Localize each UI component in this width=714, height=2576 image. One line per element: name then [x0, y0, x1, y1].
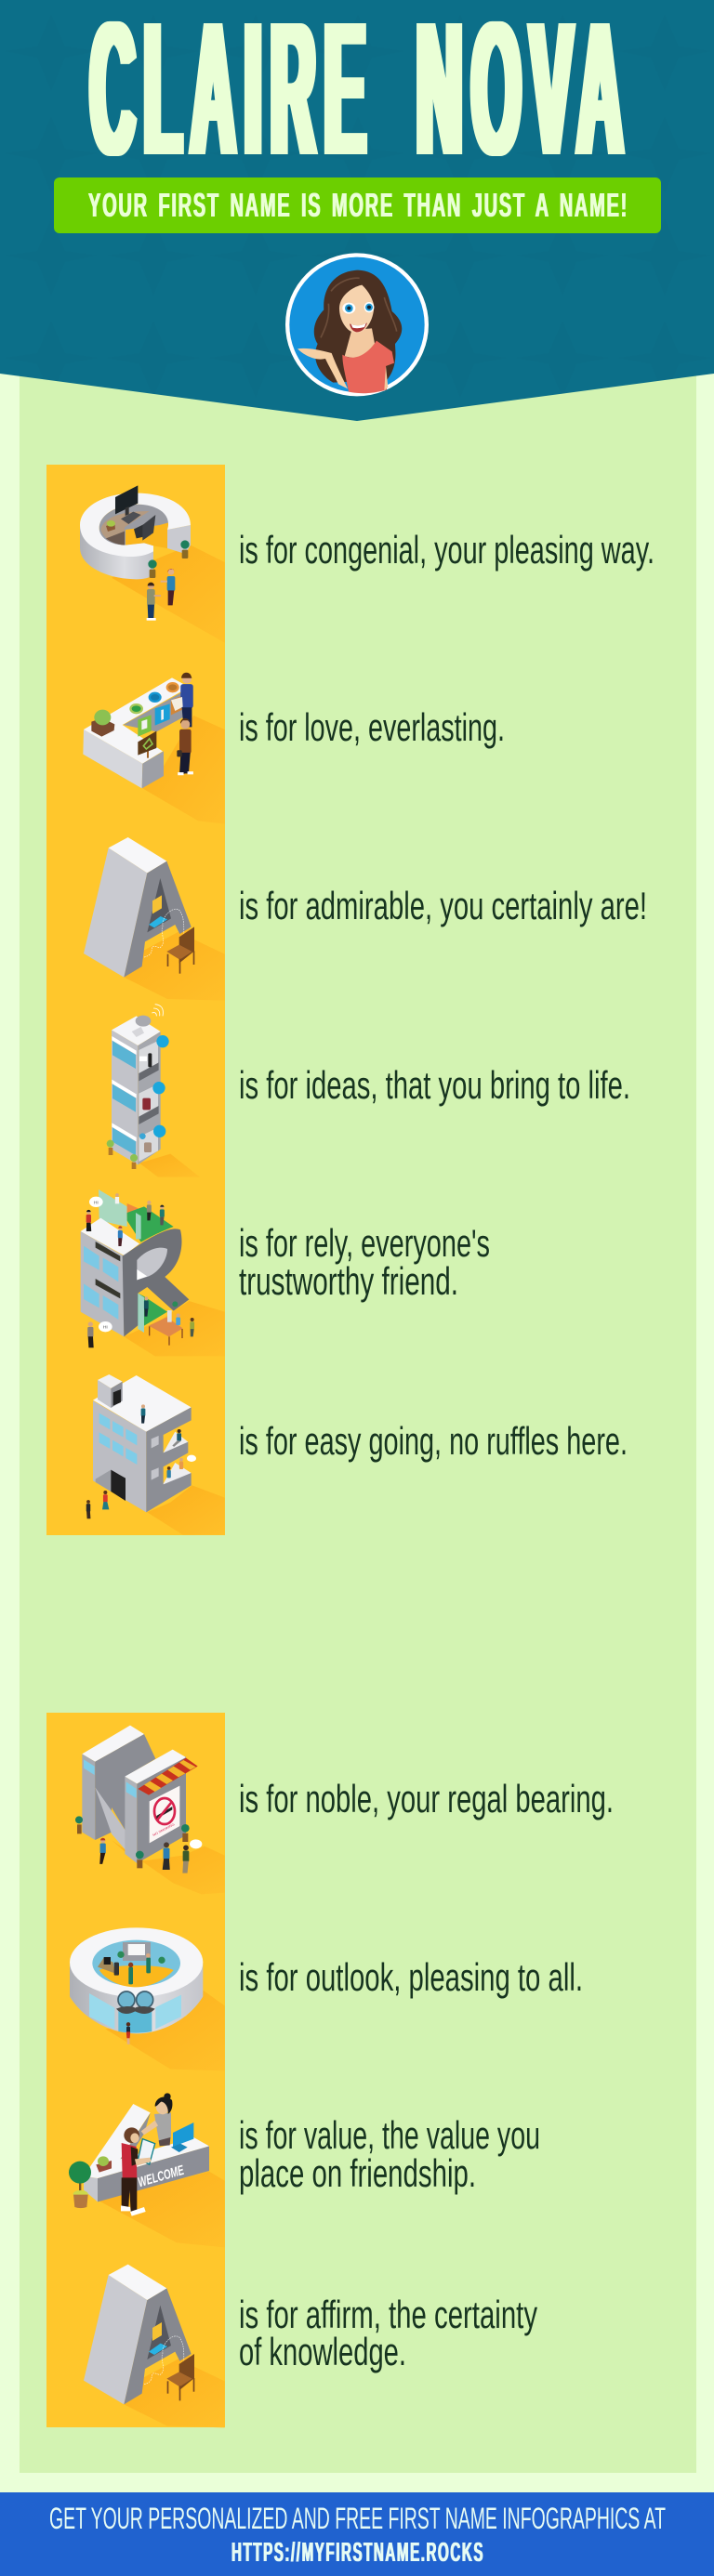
subtitle banner — [54, 177, 661, 233]
text: V lines: is for value, the value you — [239, 2113, 540, 2157]
receptionist — [141, 2093, 172, 2146]
awning — [138, 1758, 198, 1795]
text: R lines — [239, 1221, 490, 1303]
footer — [0, 2492, 714, 2576]
icon: letter A computer building — [84, 837, 225, 1001]
icon: letter N no smoking building — [75, 1726, 225, 1894]
speech bubble: Hi top: HI — [94, 1200, 99, 1205]
icon: letter V welcome desk — [69, 2093, 225, 2247]
header banner — [0, 0, 714, 421]
people on building — [86, 1193, 194, 1347]
no smoking sign: NO SMOKING — [152, 1822, 176, 1837]
speech bubble: Hi top — [89, 1197, 103, 1207]
welcome sign text: WELCOME — [137, 2163, 187, 2190]
no smoking sign — [150, 1786, 179, 1843]
icon: letter C reception desk — [80, 485, 225, 643]
icon: letter L recycling counter — [83, 673, 225, 824]
text: L line: is for love, everlasting. — [239, 705, 505, 749]
text: R lines: is for rely, everyone's — [239, 1221, 490, 1265]
panel: second name strip — [46, 1713, 225, 2427]
speech bubble: Hi bottom: HI — [103, 1325, 108, 1331]
avatar: woman in circle — [285, 253, 429, 396]
panel: content background — [20, 367, 696, 2473]
icon: letter E apartment building — [86, 1374, 225, 1535]
text: R lines: trustworthy friend. — [239, 1259, 458, 1303]
text: A2 lines: is for affirm, the certainty — [239, 2293, 537, 2336]
text: A2 lines — [239, 2293, 537, 2373]
icon: letter I office tower — [107, 1005, 200, 1177]
panel: first name strip — [46, 465, 225, 1535]
speech bubble: Hi bottom — [99, 1321, 112, 1332]
icon: letter R office building — [81, 1189, 225, 1356]
icon: letter O optician building — [70, 1927, 225, 2070]
footer: HTTPS://MYFIRSTNAME.ROCKS — [231, 2538, 484, 2568]
text: V lines — [239, 2113, 540, 2195]
text: A2 lines: of knowledge. — [239, 2330, 406, 2373]
text: V lines: place on friendship. — [239, 2151, 476, 2195]
customer with clipboard — [121, 2127, 155, 2216]
icon: letter A computer building repeat — [84, 2265, 225, 2427]
